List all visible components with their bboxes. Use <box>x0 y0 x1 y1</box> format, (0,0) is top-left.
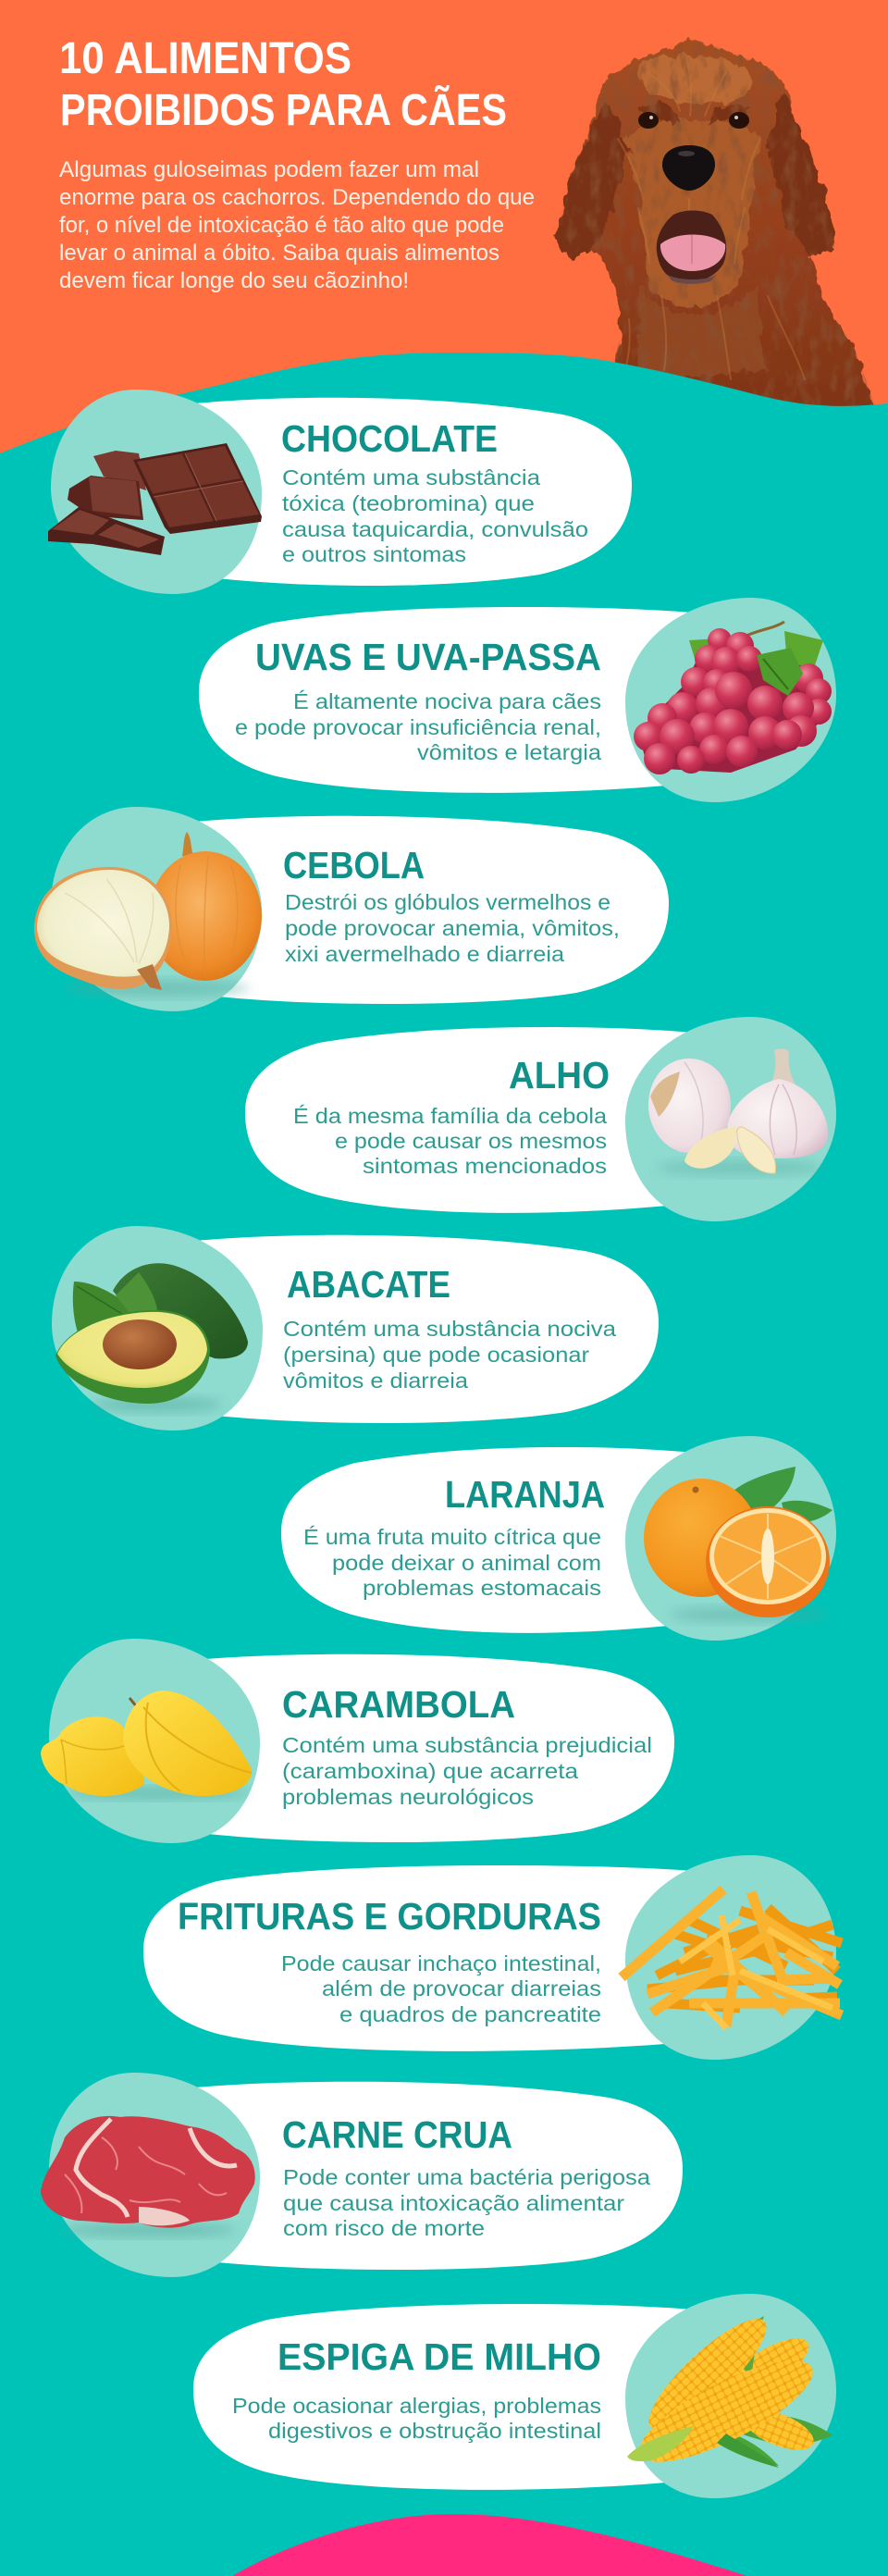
intro text: for, o nível de intoxicação é tão alto que pode <box>59 213 504 238</box>
starfruit card <box>185 1654 674 1842</box>
icon: starfruit <box>41 1690 252 1799</box>
intro text: devem ficar longe do seu cãozinho! <box>59 268 409 293</box>
meat badge <box>49 2073 260 2277</box>
fries card <box>143 1865 703 2051</box>
description: cebola: Destrói os glóbulos vermelhos e <box>285 890 610 914</box>
description: laranja: problemas estomacais <box>363 1576 601 1600</box>
icon: oranges <box>644 1467 832 1622</box>
description: chocolate: Contém uma substância <box>282 465 540 489</box>
icon: chocolate bars <box>48 443 262 555</box>
dog eyes <box>638 112 749 129</box>
panel: milho <box>193 2294 836 2498</box>
heading: chocolate: CHOCOLATE <box>281 417 498 460</box>
panel: chocolate <box>48 390 632 594</box>
intro text: levar o animal a óbito. Saiba quais alimentos <box>59 241 500 266</box>
garlic badge <box>625 1017 836 1221</box>
grapes badge <box>625 598 836 802</box>
description: alho: sintomas mencionados <box>363 1154 607 1178</box>
description: abacate: vômitos e diarreia <box>283 1368 468 1393</box>
description: uvas: e pode provocar insuficiência renal, <box>235 715 601 739</box>
icon: raw meat <box>41 2116 255 2236</box>
title: PROIBIDOS PARA CÃES <box>60 84 507 135</box>
heading: cebola: CEBOLA <box>283 844 425 886</box>
panel: cebola <box>34 807 669 1011</box>
heading: frituras: FRITURAS E GORDURAS <box>178 1895 601 1938</box>
avocado card <box>185 1235 659 1423</box>
description: cebola: pode provocar anemia, vômitos, <box>285 916 620 940</box>
chocolate badge <box>51 390 262 594</box>
description: frituras: além de provocar diarreias <box>322 1976 601 2000</box>
description: carne crua: Pode conter uma bactéria perigosa <box>283 2165 650 2189</box>
description: carambola: (caramboxina) que acarreta <box>282 1759 578 1783</box>
panel: laranja <box>281 1436 836 1641</box>
panel: abacate <box>52 1226 659 1430</box>
description: carne crua: que causa intoxicação alimentar <box>283 2191 624 2215</box>
icon: onions <box>34 832 262 997</box>
icon: avocado <box>56 1263 248 1412</box>
description: frituras: e quadros de pancreatite <box>339 2002 601 2026</box>
heading: carambola: CARAMBOLA <box>282 1683 515 1726</box>
chocolate card <box>185 398 632 586</box>
icon: corn <box>627 2305 832 2481</box>
orange card <box>281 1447 703 1633</box>
description: laranja: pode deixar o animal com <box>332 1551 601 1575</box>
description: carambola: Contém uma substância prejudicial <box>282 1733 652 1757</box>
title: 10 ALIMENTOS <box>59 34 352 83</box>
description: chocolate: tóxica (teobromina) que <box>282 491 535 515</box>
corn badge <box>625 2294 836 2498</box>
starfruit badge <box>49 1639 260 1843</box>
onion card <box>185 816 669 1004</box>
onion badge <box>51 807 262 1011</box>
description: espiga de milho: digestivos e obstrução intestinal <box>268 2419 601 2443</box>
description: carne crua: com risco de morte <box>283 2216 485 2240</box>
description: cebola: xixi avermelhado e diarreia <box>285 942 564 966</box>
orange badge <box>625 1436 836 1641</box>
description: chocolate: e outros sintomas <box>282 542 466 566</box>
dog illustration <box>555 37 879 435</box>
description: abacate: (persina) que pode ocasionar <box>283 1343 589 1367</box>
description: alho: e pode causar os mesmos <box>335 1129 607 1153</box>
intro text: enorme para os cachorros. Dependendo do que <box>59 185 535 210</box>
icon: grapes <box>634 622 832 774</box>
dog mouth <box>657 211 726 284</box>
heading: alho: ALHO <box>509 1054 610 1096</box>
description: chocolate: causa taquicardia, convulsão <box>282 517 588 541</box>
meat card <box>185 2082 683 2270</box>
intro text: Algumas guloseimas podem fazer um mal <box>59 157 479 182</box>
description: espiga de milho: Pode ocasionar alergias, problemas <box>232 2394 601 2418</box>
panel: carambola <box>41 1639 674 1843</box>
description: alho: É da mesma família da cebola <box>293 1104 607 1128</box>
pink bottom shape <box>232 2514 747 2576</box>
grapes card <box>199 607 703 793</box>
header background <box>0 0 888 500</box>
garlic card <box>245 1027 703 1213</box>
avocado badge <box>52 1226 263 1430</box>
panel: frituras <box>143 1855 842 2060</box>
icon: french fries <box>622 1889 842 2028</box>
description: abacate: Contém uma substância nociva <box>283 1317 616 1341</box>
heading: abacate: ABACATE <box>287 1263 450 1306</box>
heading: espiga de milho: ESPIGA DE MILHO <box>278 2335 601 2378</box>
dog nose <box>662 145 715 191</box>
description: carambola: problemas neurológicos <box>282 1785 534 1809</box>
corn card <box>193 2304 703 2490</box>
fries badge <box>625 1855 836 2060</box>
panel: carne <box>41 2073 683 2277</box>
panel: uvas <box>199 598 836 802</box>
description: uvas: É altamente nociva para cães <box>293 689 601 713</box>
panel: alho <box>245 1017 836 1221</box>
heading: laranja: LARANJA <box>445 1473 605 1516</box>
heading: uvas: UVAS E UVA-PASSA <box>255 636 601 678</box>
description: uvas: vômitos e letargia <box>417 740 601 764</box>
description: laranja: É uma fruta muito cítrica que <box>303 1525 601 1549</box>
description: frituras: Pode causar inchaço intestinal, <box>281 1951 601 1975</box>
icon: garlic <box>648 1049 828 1175</box>
heading: carne crua: CARNE CRUA <box>282 2113 512 2156</box>
